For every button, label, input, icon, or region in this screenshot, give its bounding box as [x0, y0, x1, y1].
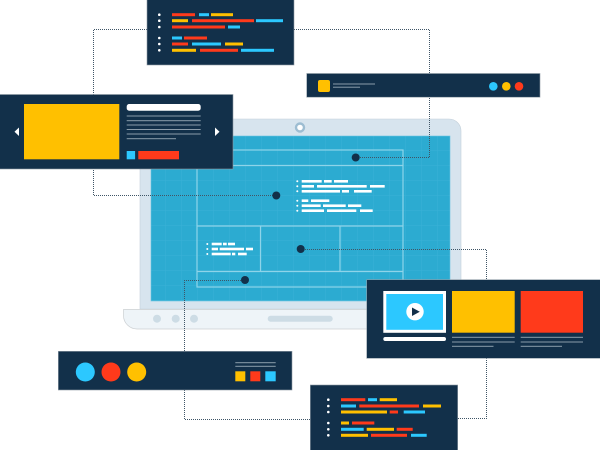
wireframe code text block, lower	[206, 243, 253, 255]
wireframe code text block, upper	[296, 180, 385, 212]
code lines	[341, 398, 441, 437]
large color circles	[76, 362, 146, 382]
dotted connector: center marker to bottom code panel	[301, 250, 486, 418]
red thumbnail text lines	[521, 337, 583, 347]
wireframe layout	[197, 150, 403, 287]
video thumbnail	[385, 292, 444, 331]
yellow thumbnail	[452, 291, 515, 333]
marker dot: center	[297, 245, 305, 253]
logo square	[318, 80, 330, 92]
slide text lines	[127, 116, 201, 139]
right arrow	[215, 128, 220, 136]
screen	[151, 136, 450, 301]
laptop base	[124, 310, 477, 329]
toolbar color dots	[489, 82, 523, 91]
laptop	[124, 119, 477, 329]
left arrow	[14, 128, 19, 136]
dotted connector: top code panel to upper marker	[294, 30, 430, 158]
palette squares	[235, 371, 276, 381]
toolbar text lines	[333, 84, 375, 88]
slide red button	[138, 151, 179, 159]
marker dot: upper	[352, 154, 360, 162]
dotted connector: lower marker to bottom code panel	[184, 280, 310, 420]
code bullets	[327, 398, 330, 437]
panel: image slider	[0, 94, 233, 169]
panel: top code snippet	[147, 0, 294, 65]
palette text lines	[235, 362, 276, 367]
video caption bar	[383, 337, 446, 341]
yellow thumbnail text lines	[452, 337, 515, 347]
slide small button	[127, 151, 135, 159]
panel: bottom code snippet	[310, 385, 458, 450]
panel: video gallery	[367, 280, 600, 358]
code lines	[172, 13, 283, 52]
code bullets	[158, 13, 161, 52]
red thumbnail	[521, 291, 583, 333]
slide title bar	[127, 104, 201, 111]
panel: top right toolbar	[307, 74, 540, 97]
slide image	[24, 104, 119, 159]
marker dot: left	[272, 192, 280, 200]
laptop lid bezel	[140, 119, 461, 309]
panel: color palette	[58, 351, 292, 390]
marker dot: lower	[241, 276, 249, 284]
dotted connector: top code panel to left marker	[94, 30, 276, 196]
webcam	[296, 124, 304, 132]
